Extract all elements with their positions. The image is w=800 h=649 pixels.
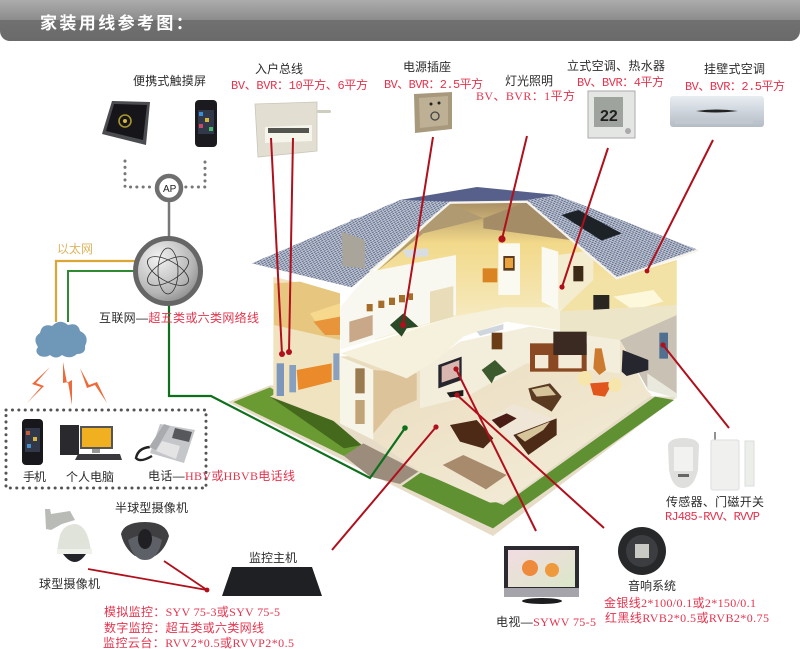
white right partition <box>542 247 558 310</box>
smartphone icon <box>195 100 217 147</box>
kitchen counter <box>297 363 332 390</box>
PTZ camera icon <box>45 509 92 562</box>
bottom lawn <box>402 397 674 528</box>
cloud <box>35 322 87 358</box>
house illustration <box>228 187 698 536</box>
base slab <box>228 385 677 536</box>
green network line to house <box>169 300 405 478</box>
white central wall <box>498 243 520 295</box>
blue garage device <box>659 333 668 359</box>
spec: audio line 2: 红黑线RVB2*0.5或RVB2*0.75 <box>605 610 769 625</box>
label: ethernet: 以太网 <box>57 241 93 256</box>
car <box>622 350 648 376</box>
label: phone: 手机 <box>23 470 46 484</box>
wall cabinet <box>530 343 587 372</box>
phone icon <box>22 419 43 465</box>
picture frame <box>503 256 515 271</box>
spec: wall AC: BV、BVR：2.5平方 <box>685 78 785 94</box>
label: sensors: 传感器、门磁开关 <box>666 494 764 509</box>
spec: lighting: BV、BVR：1平方 <box>476 88 575 103</box>
label: PTZ camera: 球型摄像机 <box>39 576 100 591</box>
label: portable touch screen: 便携式触摸屏 <box>133 73 206 88</box>
lightning bolts <box>27 362 107 405</box>
spec: audio line 1: 金银线2*100/0.1或2*150/0.1 <box>604 595 756 610</box>
tablet icon <box>102 101 150 145</box>
magnet icon <box>745 441 754 486</box>
columns <box>277 363 284 396</box>
left roof <box>252 200 450 287</box>
ac living <box>477 324 503 336</box>
AP node <box>157 176 181 200</box>
picture living <box>492 333 502 349</box>
motion sensor icon <box>668 438 699 488</box>
label: main line: 入户总线 <box>255 61 303 76</box>
spec: floor AC: BV、BVR：4平方 <box>577 74 664 90</box>
upper room back <box>375 202 677 340</box>
green end dot <box>402 425 408 431</box>
label: telephone cable: 电话—HBV或HBVB电话线 <box>148 469 295 483</box>
rear roof ridge <box>400 187 557 203</box>
label: wall AC: 挂壁式空调 <box>704 61 765 76</box>
speaker icon <box>618 527 666 575</box>
roof white fascia <box>370 202 698 278</box>
surveillance host icon <box>222 567 322 596</box>
dormer wall <box>342 232 365 268</box>
stairs <box>373 370 417 433</box>
ac upper <box>403 248 428 257</box>
garage <box>620 313 677 397</box>
thermostat icon: 22 <box>600 108 618 125</box>
title: 家装用线参考图： <box>40 13 195 33</box>
spec: sensors: RJ485-RVV、RVVP <box>665 510 760 524</box>
right bedroom <box>560 262 677 312</box>
power socket icon <box>414 92 452 133</box>
wall panel <box>349 315 373 343</box>
right floor strip <box>560 305 677 340</box>
camera cable junction <box>205 588 209 592</box>
label: PC: 个人电脑 <box>66 470 114 484</box>
attic ceiling right <box>483 202 570 240</box>
attic ceiling left <box>377 203 483 272</box>
orange desk <box>483 268 497 282</box>
statue <box>593 348 606 375</box>
thermostat icon <box>588 91 635 138</box>
living room tv <box>438 357 462 388</box>
spec: digital surveillance: 数字监控：超五类或六类网线 <box>104 620 264 635</box>
picture frame right <box>573 266 583 281</box>
stairwell pillar <box>340 357 373 440</box>
floor mat <box>443 455 507 489</box>
TV icon <box>504 546 579 604</box>
label: internet cable: 互联网—超五类或六类网络线 <box>99 310 259 325</box>
bed <box>613 290 663 310</box>
garage ramp <box>647 373 677 398</box>
right roof <box>527 195 698 278</box>
living room back wall <box>420 327 620 408</box>
stone path <box>344 443 418 484</box>
upper floor slab <box>341 305 677 378</box>
sofa left <box>450 420 493 448</box>
tv cabinet <box>593 295 609 312</box>
door panels <box>355 368 365 393</box>
spec: socket: BV、BVR：2.5平方 <box>384 76 483 92</box>
sofa back <box>528 383 562 412</box>
rug <box>490 404 555 443</box>
camera cables <box>88 561 207 590</box>
dome camera icon <box>121 522 169 560</box>
plant upper <box>390 313 418 337</box>
label: floor AC and water heater: 立式空调、热水器 <box>567 58 665 73</box>
green network line to cloud <box>68 271 135 322</box>
doorway <box>430 286 453 323</box>
door transmitter icon <box>711 432 739 490</box>
red callout dots <box>279 235 666 430</box>
spec: main line: BV、BVR：10平方、6平方 <box>231 77 368 93</box>
dotted device box <box>6 410 206 488</box>
plant living <box>482 360 507 383</box>
red callout lines <box>271 136 729 550</box>
white partition <box>341 255 456 349</box>
label: socket: 电源插座 <box>403 59 451 74</box>
left lawn <box>233 387 362 456</box>
spec: analog surveillance: 模拟监控：SYV 75-3或SYV 75-5 <box>104 605 280 619</box>
ethernet gold line <box>56 261 135 322</box>
AP dotted links <box>125 161 205 187</box>
tv cabinet living <box>447 390 463 397</box>
dormer roof <box>350 200 423 242</box>
sofa right <box>513 418 557 455</box>
bedroom left <box>274 282 340 340</box>
lower left room <box>273 277 340 423</box>
label: dome camera: 半球型摄像机 <box>115 500 188 515</box>
skylight <box>562 210 622 241</box>
wall pictures <box>367 293 413 311</box>
personal computer icon <box>60 425 122 460</box>
distribution panel icon <box>255 102 331 157</box>
telephone icon <box>136 424 195 463</box>
coffee table <box>492 413 517 428</box>
internet hub <box>136 238 200 304</box>
label: audio: 音响系统 <box>628 578 676 593</box>
header bar <box>0 0 800 41</box>
label: lighting: 灯光照明 <box>505 74 553 88</box>
ground floor <box>270 340 652 503</box>
lawn shadow <box>270 397 362 448</box>
label: TV cable: 电视—SYWV 75-5 <box>496 614 596 629</box>
AP to hub connector <box>168 200 170 240</box>
orange table <box>590 382 613 397</box>
label: host: 监控主机 <box>249 551 297 565</box>
AP node: AP <box>163 184 177 195</box>
wall air conditioner icon <box>670 96 764 127</box>
